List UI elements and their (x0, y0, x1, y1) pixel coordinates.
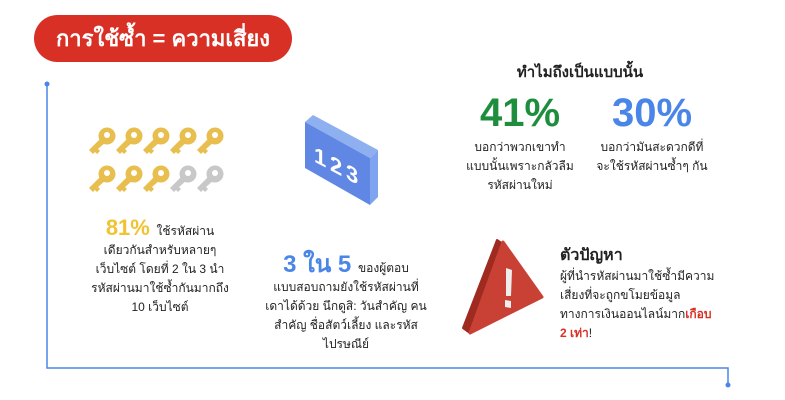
icon: keys grid (89, 128, 224, 192)
text block: 81%: เดียวกันสำหรับหลายๆ เว็บไซต์ โดยที่ 2 ใน 3 นำรหัสผ่านมาใช้ซ้ำกันมากถึง 10 เว็บไซต์ (91, 243, 229, 314)
text block: problem: ตัวปัญหา (560, 247, 623, 264)
stat: 30% (596, 91, 708, 173)
heading: why: ทำไมถึงเป็นแบบนั้น (517, 64, 643, 81)
stat: 41%: 41% (480, 91, 560, 135)
title pill (34, 15, 292, 62)
icon: 123 tile: 1 (314, 142, 326, 173)
title pill: การใช้ซ้ำ = ความเสี่ยง (56, 26, 270, 51)
stat: 30%: บอกว่ามันสะดวกดีที่จะใช้รหัสผ่านซ้ำๆ กัน (596, 140, 708, 173)
stat: 30%: 30% (612, 91, 692, 135)
stat: 41%: บอกว่าพวกเขาทำแบบนั้นเพราะกลัวลืมรหัสผ่านใหม่ (466, 140, 574, 192)
stat: 41% (466, 91, 574, 192)
icon: warning triangle (462, 239, 544, 335)
text block: 81%: 81% ใช้รหัสผ่าน (106, 215, 214, 240)
text block: problem: ผู้ที่นำรหัสผ่านมาใช้ซ้ำมีความเสี่ยงที่จะถูกขโมยข้อมูลทางการเงินออนไลน์มากเกือบ 2 เท่า! (560, 269, 714, 340)
icon: 123 tile (305, 115, 378, 205)
text block: 3 in 5: 3 ใน 5 ของผู้ตอบ (283, 251, 409, 278)
icon: 123 tile: 3 (346, 159, 358, 190)
text block: 3 in 5 (265, 250, 427, 351)
text block: 3 in 5: แบบสอบถามยังใช้รหัสผ่านที่เดาได้ด้วย นึกดูสิ: วันสำคัญ คนสำคัญ ชื่อสัตว์เลี้ยง และรหัสไปรษณีย์ (265, 280, 427, 351)
icon: 123 tile: 2 (330, 150, 342, 181)
